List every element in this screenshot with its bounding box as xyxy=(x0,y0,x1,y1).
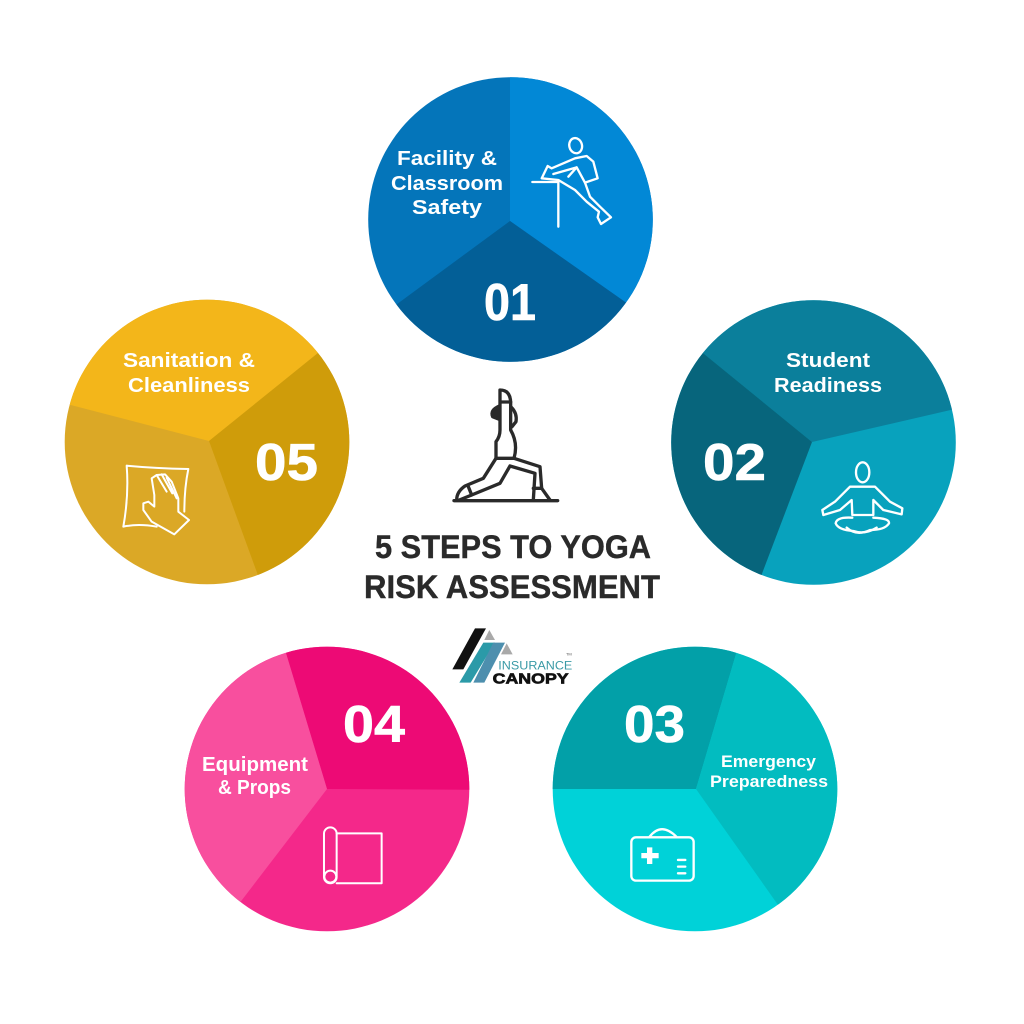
number 02: 02 xyxy=(703,434,766,492)
label: facility and classroom safety: Facility & xyxy=(397,148,497,170)
label: facility and classroom safety: Safety xyxy=(412,197,483,219)
label: sanitation and cleanliness xyxy=(123,350,255,397)
label: equipment and props: Equipment xyxy=(202,754,308,776)
panel: step 05 sanitation and cleanliness xyxy=(64,300,350,584)
icon: yoga mat xyxy=(324,827,382,883)
number 01: 01 xyxy=(484,274,536,332)
icon: first aid kit xyxy=(631,829,694,881)
panel: step 02 student readiness xyxy=(671,300,956,585)
number 03: 03 xyxy=(624,696,685,754)
panel: step 03 emergency preparedness xyxy=(552,646,838,932)
logo: insurance canopy: INSURANCE xyxy=(498,658,572,672)
label: student readiness: Readiness xyxy=(774,375,882,397)
icon: warrior yoga pose xyxy=(454,390,558,501)
label: emergency preparedness: Emergency xyxy=(721,752,817,771)
label: facility and classroom safety xyxy=(391,148,503,219)
title xyxy=(364,529,660,605)
panel: step 04 equipment and props xyxy=(184,646,470,932)
label: sanitation and cleanliness: Sanitation & xyxy=(123,350,255,372)
label: facility and classroom safety: Classroom xyxy=(391,173,503,195)
logo: insurance canopy: CANOPY xyxy=(493,671,569,687)
label: emergency preparedness xyxy=(710,752,828,791)
number 05: 05 xyxy=(255,434,318,492)
title: 5 STEPS TO YOGA xyxy=(375,529,651,565)
label: equipment and props: & Props xyxy=(218,777,291,799)
icon: meditating person xyxy=(822,462,902,533)
title: RISK ASSESSMENT xyxy=(364,569,660,605)
label: student readiness: Student xyxy=(786,350,870,372)
panel: step 01 facility and classroom safety xyxy=(368,77,653,362)
label: sanitation and cleanliness: Cleanliness xyxy=(128,375,250,397)
label: equipment and props xyxy=(202,754,308,799)
logo: insurance canopy: TM xyxy=(566,651,572,656)
label: emergency preparedness: Preparedness xyxy=(710,772,828,791)
icon: person stretching leg on barre xyxy=(532,137,611,227)
label: student readiness xyxy=(774,350,882,397)
number 04: 04 xyxy=(343,696,405,754)
icon: hand wiping with cloth xyxy=(123,466,189,534)
logo: insurance canopy xyxy=(452,628,572,687)
